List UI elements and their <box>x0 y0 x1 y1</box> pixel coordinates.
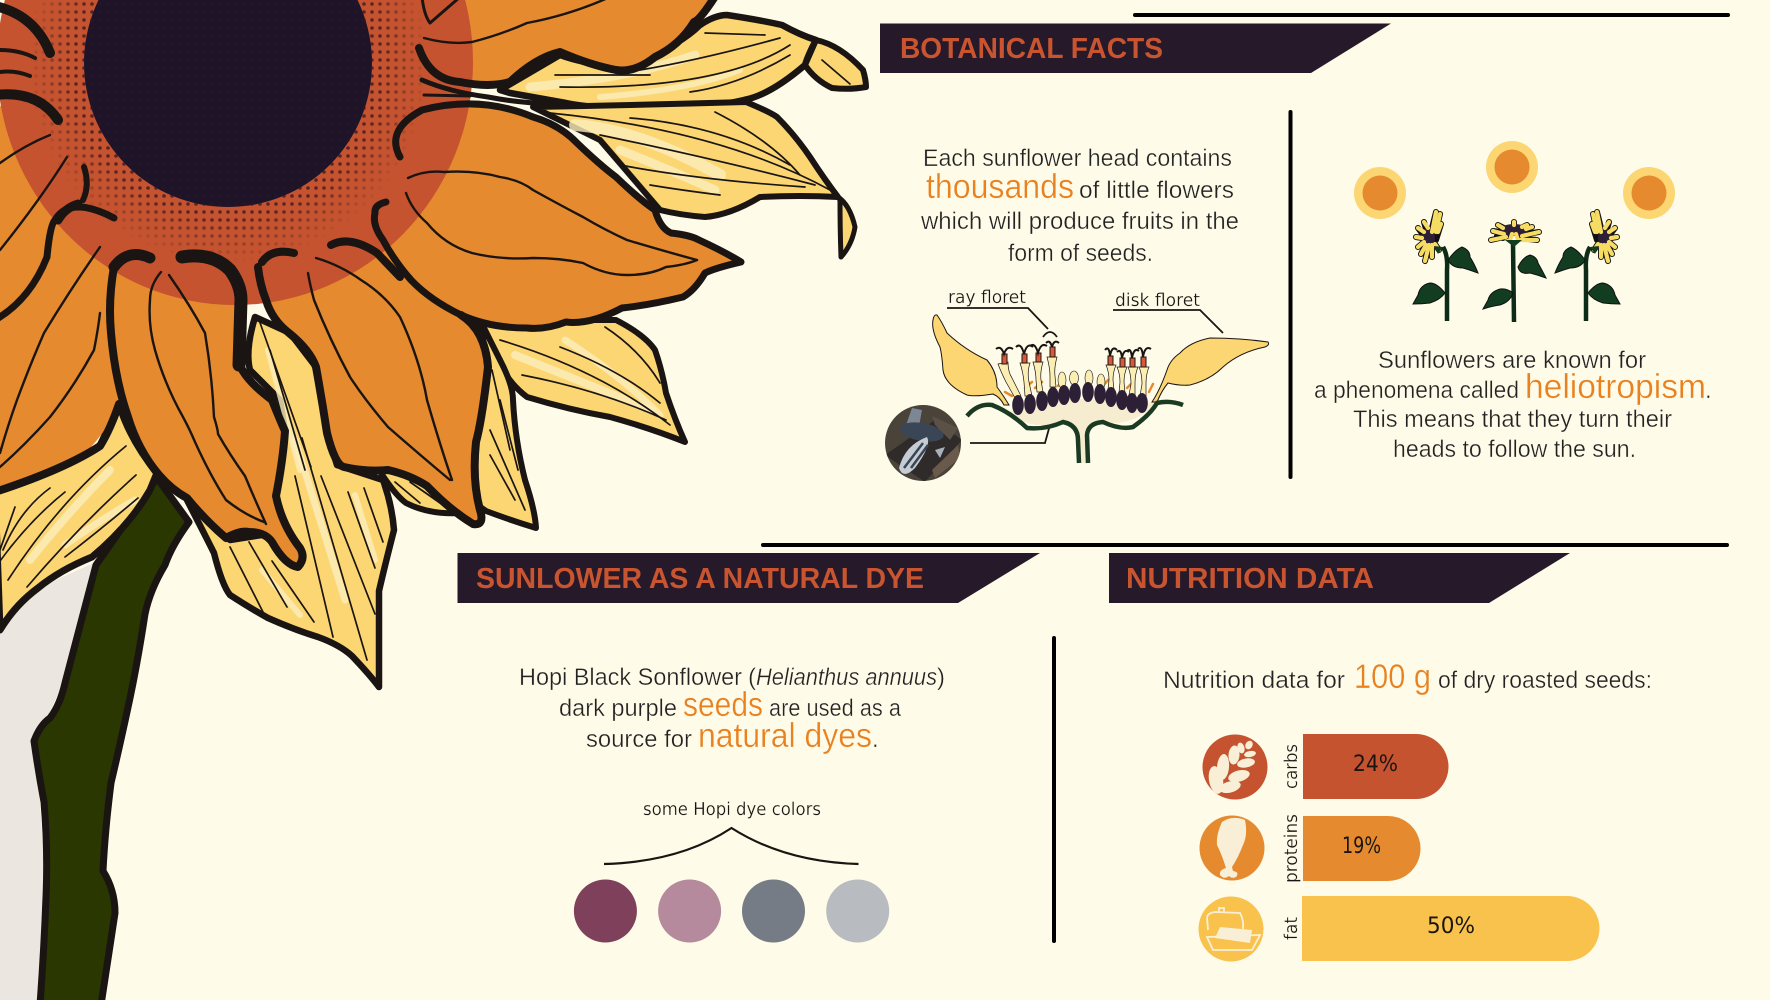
yellow petal: narrow right <box>470 320 536 528</box>
text block: nutrition intro: Nutrition data for <box>1163 667 1345 694</box>
stem <box>34 478 189 1000</box>
yellow petal: lower right <box>470 320 685 442</box>
text block: natural dye: natural dyes <box>698 717 872 755</box>
swatch: dusty pink <box>658 880 721 942</box>
yellow petal: small bottom <box>379 470 470 513</box>
yellow petal: right <box>533 102 855 257</box>
yellow petal: left <box>0 404 157 630</box>
bar: fat <box>1281 896 1600 961</box>
text block: flower heads: thousands <box>926 168 1074 206</box>
text block: nutrition intro: of dry roasted seeds: <box>1438 667 1652 694</box>
text block: natural dye <box>519 664 945 755</box>
text block: flower heads: Each sunflower head contains <box>923 145 1232 172</box>
bar: proteins: proteins <box>1281 814 1302 883</box>
ray petal left <box>933 315 1009 405</box>
swatch: dark plum <box>574 880 637 942</box>
brace <box>604 828 858 864</box>
swatch: slate <box>742 880 805 942</box>
tall disk florets <box>998 357 1149 398</box>
bar: carbs: 24% <box>1353 752 1398 777</box>
green bracts <box>967 402 1183 463</box>
text block: nutrition intro <box>1163 658 1652 696</box>
text block: natural dye: Helianthus annuus <box>756 664 937 691</box>
text block: natural dye: are used as a <box>769 695 902 722</box>
legend caption: some Hopi dye colors <box>643 799 821 820</box>
bar: proteins <box>1281 814 1420 883</box>
section banner: natural dye <box>458 553 1040 603</box>
text block: heliotropism: heliotropism <box>1525 368 1706 406</box>
section banner: nutrition data: NUTRITION DATA <box>1126 563 1374 595</box>
section banner: botanical facts <box>880 24 1391 73</box>
bar: carbs: carbs <box>1281 744 1302 789</box>
text block: heliotropism: heads to follow the sun. <box>1393 436 1636 463</box>
icon: drumstick <box>1200 816 1264 880</box>
seed photo <box>885 405 962 482</box>
vertical divider: botanical <box>1288 110 1292 479</box>
text block: heliotropism: This means that they turn their <box>1353 406 1672 433</box>
text block: natural dye: Hopi Black Sonflower <box>519 664 742 691</box>
text block: heliotropism: Sunflowers are known for <box>1378 347 1646 374</box>
icon: sunflower facing right <box>1555 212 1620 321</box>
section banner: natural dye: SUNLOWER AS A NATURAL DYE <box>476 563 924 595</box>
small buds <box>1058 370 1105 390</box>
text block: natural dye: . <box>872 726 879 753</box>
bar: fat: fat <box>1281 917 1302 940</box>
icon: wheat <box>1202 734 1268 800</box>
text block: heliotropism: . <box>1705 377 1712 404</box>
diagram: floret cross-section <box>885 287 1269 482</box>
text block: natural dye: dark purple <box>559 695 677 722</box>
illustration: sunflower <box>0 0 866 1000</box>
central disc <box>84 0 372 207</box>
petal outlines and curls <box>0 0 741 567</box>
icon: sunflower facing up <box>1483 222 1546 322</box>
yellow petal: centre bottom <box>187 317 394 687</box>
sun left <box>1354 167 1406 219</box>
text block: nutrition intro: 100 g <box>1354 658 1431 696</box>
bar: carbs <box>1281 734 1448 799</box>
leader lines <box>947 308 1223 443</box>
sepals <box>1005 378 1153 396</box>
ray petal right <box>1152 338 1269 402</box>
text block: natural dye: seeds <box>683 686 763 724</box>
bar: proteins: 19% <box>1342 834 1381 859</box>
text block: heliotropism <box>1314 347 1712 463</box>
vertical divider: dye <box>1052 636 1056 943</box>
label: disk floret: disk floret <box>1115 290 1200 311</box>
orange petal fills <box>0 0 741 570</box>
icon: butter dish <box>1198 896 1264 962</box>
text block: flower heads <box>920 145 1239 267</box>
stamens <box>1002 347 1146 367</box>
receptacle <box>1007 399 1157 463</box>
middle rule <box>761 543 1729 547</box>
text block: flower heads: which will produce fruits in the <box>920 208 1239 235</box>
petal veins <box>0 0 697 524</box>
text block: natural dye: source for <box>586 726 692 753</box>
icon: sunflower facing left <box>1413 212 1478 321</box>
icon group: suns <box>1354 141 1675 219</box>
leaf behind stem <box>0 562 96 1000</box>
yellow petal: upper right <box>500 15 866 108</box>
top rule <box>1133 13 1730 17</box>
legend: some Hopi dye colors <box>574 799 889 942</box>
section banner: botanical facts: BOTANICAL FACTS <box>900 33 1163 65</box>
stigmas <box>996 342 1151 358</box>
text block: flower heads: form of seeds. <box>1008 240 1153 267</box>
ovaries <box>1012 382 1148 415</box>
halftone dots <box>34 2 422 260</box>
text block: heliotropism: a phenomena called <box>1314 377 1519 404</box>
swatch: light grey <box>826 880 889 942</box>
text block: natural dye: ( <box>748 664 756 691</box>
section banner: nutrition data <box>1109 553 1570 603</box>
sun right <box>1623 167 1675 219</box>
bar: fat: 50% <box>1427 914 1475 939</box>
sun middle <box>1486 141 1538 193</box>
text block: flower heads: of little flowers <box>1079 177 1234 204</box>
label: ray floret: ray floret <box>948 287 1026 308</box>
text block: natural dye: ) <box>937 664 945 691</box>
flower ring <box>0 0 473 305</box>
bar chart: nutrition <box>1281 734 1600 961</box>
